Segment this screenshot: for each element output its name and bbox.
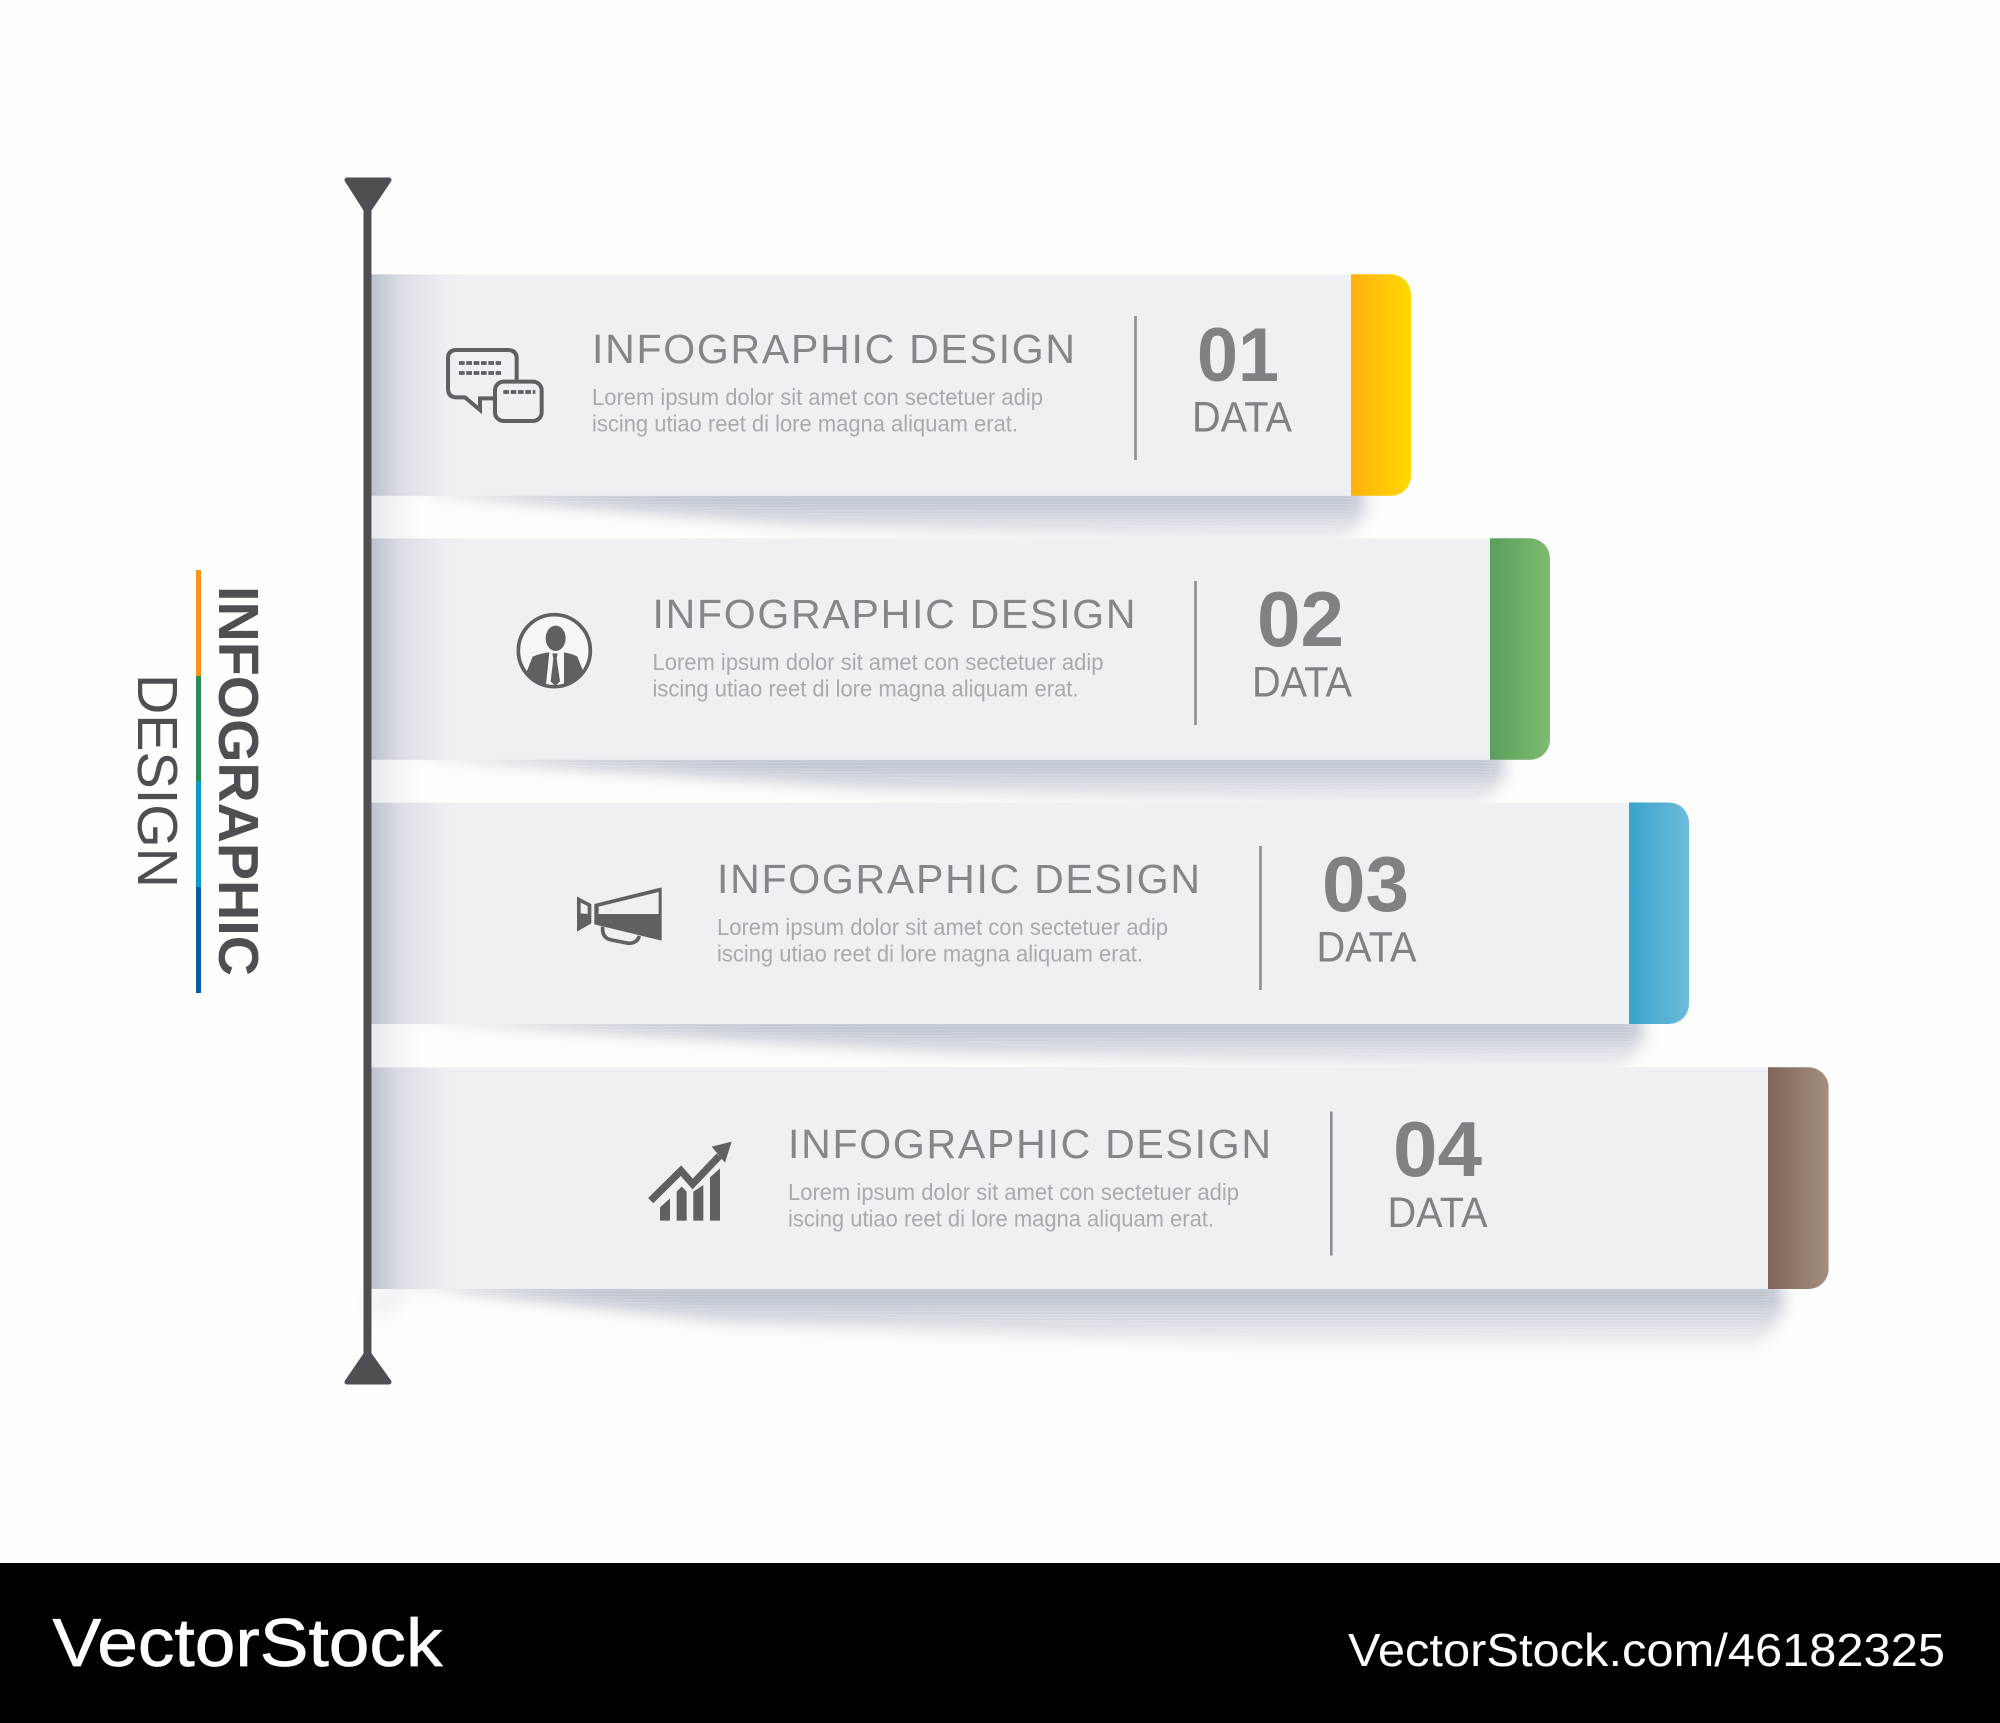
card 4 divider: [1330, 1112, 1333, 1256]
card 2 tab: [1490, 538, 1550, 760]
card 1 divider: [1134, 316, 1137, 460]
card 4 label: DATA: [1388, 1189, 1488, 1237]
shadow under card 1: [405, 488, 1366, 546]
card 4 body text: Lorem ipsum dolor sit amet con sectetuer adip: [788, 1179, 1239, 1205]
card 2 body text: [652, 649, 1104, 702]
fade under last card: [372, 1285, 420, 1325]
card 2 number: 02: [1257, 575, 1344, 663]
card 1: [371, 274, 1411, 496]
card 1 number: 01: [1197, 313, 1279, 398]
card 1 body text: Lorem ipsum dolor sit amet con sectetuer adip: [592, 384, 1043, 410]
card 2 divider: [1194, 581, 1197, 725]
card 2 label: DATA: [1252, 658, 1352, 706]
card 3 body text: [717, 914, 1168, 967]
card 2 heading: INFOGRAPHIC DESIGN: [652, 591, 1136, 637]
card 3 body text: Lorem ipsum dolor sit amet con sectetuer adip: [717, 914, 1168, 940]
shadow under card 4: [405, 1281, 1784, 1352]
card 2: [371, 538, 1550, 760]
card 3 heading: INFOGRAPHIC DESIGN: [717, 856, 1200, 902]
card 1 heading: INFOGRAPHIC DESIGN: [592, 326, 1075, 372]
card 1 panel: [371, 274, 1352, 496]
moire texture over shadows: [440, 496, 1772, 1334]
vertical title: INFOGRAPHIC: INFOGRAPHIC: [206, 586, 270, 976]
card 4 heading: INFOGRAPHIC DESIGN: [788, 1121, 1271, 1167]
card 1 label: DATA: [1192, 394, 1292, 442]
card 4 tab: [1768, 1067, 1829, 1289]
card 1 body text: [592, 384, 1043, 437]
card 3: [371, 802, 1689, 1024]
card 3 number: 03: [1322, 840, 1409, 928]
vertical axis with triangles: [347, 180, 389, 1382]
card 4: [371, 1067, 1829, 1289]
shadow under card 2: [405, 752, 1505, 810]
card 4 icon: growth chart: [651, 1142, 732, 1221]
card 4 body text: iscing utiao reet di lore magna aliquam erat.: [788, 1206, 1214, 1232]
card 1 icon: chat bubbles: [448, 350, 542, 421]
shadow under card 3: [405, 1016, 1644, 1074]
gap shading between cards: [372, 496, 422, 1067]
card 1 tab: [1351, 274, 1411, 496]
vertical title: DESIGN: DESIGN: [125, 674, 189, 888]
footer image id: VectorStock.com/46182325: [1348, 1624, 1945, 1676]
footer brand: VectorStock: [52, 1605, 444, 1681]
colour bar: [196, 570, 201, 993]
card 4 number: 04: [1393, 1105, 1482, 1193]
card 1 body text: iscing utiao reet di lore magna aliquam erat.: [592, 411, 1018, 437]
card 3 label: DATA: [1316, 924, 1417, 972]
card 3 body text: iscing utiao reet di lore magna aliquam erat.: [717, 941, 1143, 967]
card 2 panel: [371, 538, 1491, 760]
card 2 body text: iscing utiao reet di lore magna aliquam erat.: [652, 676, 1078, 702]
card 2 body text: Lorem ipsum dolor sit amet con sectetuer adip: [652, 649, 1104, 675]
footer bar: [0, 1563, 2000, 1723]
card 4 body text: [788, 1179, 1239, 1232]
card 2 icon: businessman: [518, 615, 590, 687]
card 4 panel: [371, 1067, 1769, 1289]
card 3 tab: [1629, 802, 1689, 1024]
card 3 panel: [371, 802, 1630, 1024]
card 3 divider: [1259, 846, 1262, 990]
card 3 icon: megaphone: [577, 887, 662, 943]
